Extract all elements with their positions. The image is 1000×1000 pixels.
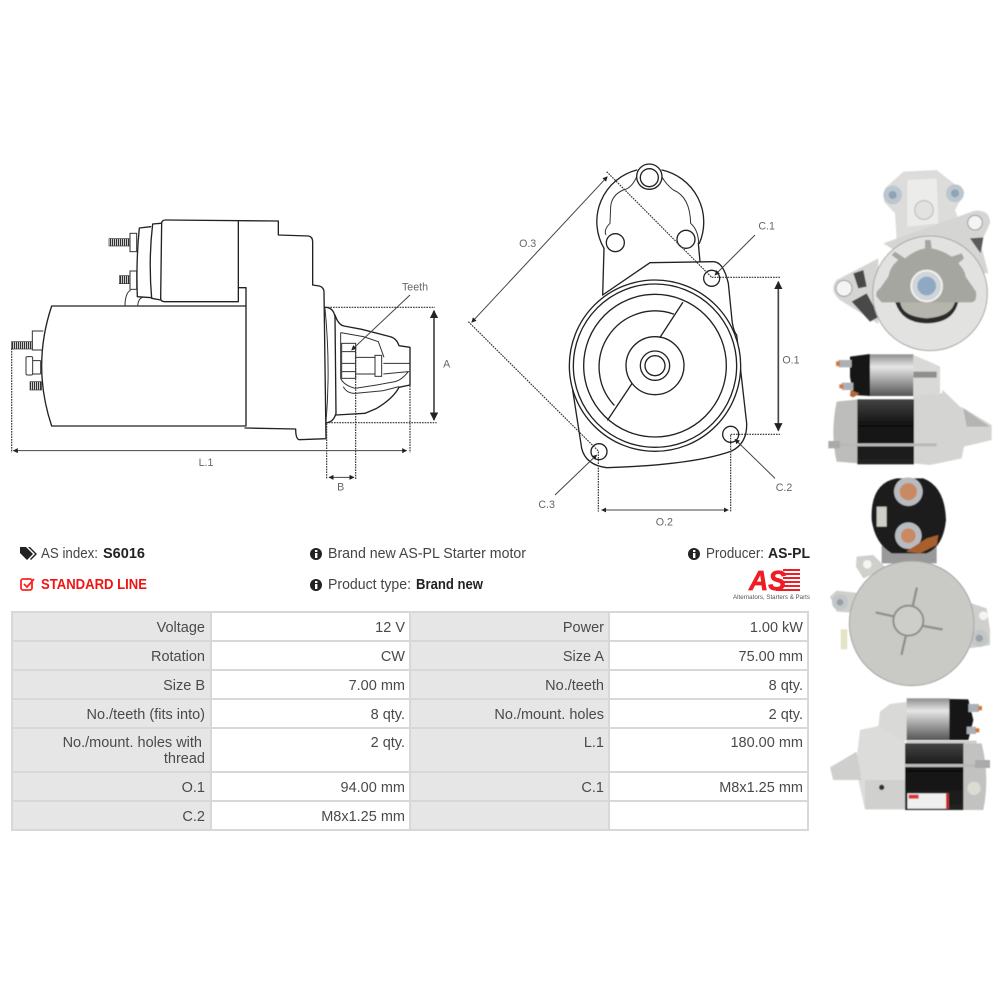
specification table xyxy=(11,611,809,831)
specification table: 12 V xyxy=(375,620,405,636)
mounting plate outline xyxy=(573,170,747,468)
specification table: Voltage xyxy=(157,620,205,636)
specification table: 2 qty. xyxy=(769,707,803,723)
specification table: Size A xyxy=(563,649,604,665)
specification table: Power xyxy=(563,620,604,636)
info: product type xyxy=(310,577,484,593)
front view labels: O.3 xyxy=(519,238,536,250)
icon: check square xyxy=(21,579,34,590)
motor end terminals xyxy=(12,331,43,390)
info: AS index: AS index: xyxy=(41,546,98,562)
specification table: Rotation xyxy=(151,649,205,665)
side view labels: B xyxy=(337,482,344,494)
specification table: 1.00 kW xyxy=(750,620,803,636)
specification table: M8x1.25 mm xyxy=(321,809,405,825)
specification table: 8 qty. xyxy=(769,678,803,694)
side view labels: A xyxy=(443,358,451,370)
specification table: 8 qty. xyxy=(371,707,405,723)
motor housing outline xyxy=(42,220,326,440)
side view labels: Teeth xyxy=(402,282,428,294)
specification table: O.1 xyxy=(182,780,205,796)
specification table: 94.00 mm xyxy=(341,780,405,796)
side view technical drawing xyxy=(12,220,451,494)
pinion nose xyxy=(325,307,410,423)
specification table: 75.00 mm xyxy=(739,649,803,665)
logo: AS xyxy=(733,565,810,601)
front view holes xyxy=(591,164,739,460)
info: AS index xyxy=(20,546,145,562)
info: producer xyxy=(688,546,810,562)
specification table: Size B xyxy=(163,678,205,694)
dimension guides xyxy=(12,307,437,479)
specification table: C.1 xyxy=(581,780,604,796)
specification table: 7.00 mm xyxy=(349,678,405,694)
info: producer: Producer: xyxy=(706,546,764,562)
specification table: L.1 xyxy=(584,735,604,751)
icon: tags xyxy=(20,547,37,560)
specification table: No./teeth (fits into) xyxy=(87,707,205,723)
info: AS index: S6016 xyxy=(103,546,145,562)
photo: starter front view xyxy=(833,170,990,351)
photo: starter opposite side view xyxy=(830,698,990,810)
specification table: CW xyxy=(381,649,405,665)
front view labels: C.2 xyxy=(776,482,792,494)
specification table: No./teeth xyxy=(545,678,604,694)
info: product type: Product type: xyxy=(328,577,411,593)
specification table: 2 qty. xyxy=(371,735,405,751)
front view labels xyxy=(519,220,800,528)
icon: info xyxy=(310,548,322,560)
icon: info xyxy=(688,548,700,560)
info: standard line: STANDARD LINE xyxy=(41,577,147,593)
specification table: thread xyxy=(164,751,205,767)
front view technical drawing xyxy=(468,164,800,528)
front view dimension guides xyxy=(468,172,780,512)
side view labels xyxy=(199,282,451,494)
dimension arrows xyxy=(13,295,434,477)
front flange rings xyxy=(569,280,741,451)
side view labels: L.1 xyxy=(199,457,213,469)
specification table: M8x1.25 mm xyxy=(719,780,803,796)
front view labels: O.1 xyxy=(782,355,800,367)
info: product type: Brand new xyxy=(416,577,484,593)
specification table: No./mount. holes xyxy=(494,707,604,723)
photo: starter side view xyxy=(828,354,992,465)
front view labels: O.2 xyxy=(656,516,673,528)
photo: starter rear view xyxy=(830,477,990,686)
specification table: C.2 xyxy=(182,809,205,825)
front view labels: C.1 xyxy=(758,220,775,232)
specification table: 180.00 mm xyxy=(730,735,803,751)
specification table: No./mount. holes with xyxy=(63,735,202,751)
solenoid terminals xyxy=(109,233,137,289)
logo: AS: AS xyxy=(748,565,786,596)
icon: info xyxy=(310,579,322,591)
logo: AS: Alternators, Starters & Parts xyxy=(733,595,810,601)
front view arrows xyxy=(472,177,778,510)
info: description: Brand new AS-PL Starter motor xyxy=(328,546,526,562)
info: producer: AS-PL xyxy=(768,546,810,562)
front view labels: C.3 xyxy=(538,499,555,511)
